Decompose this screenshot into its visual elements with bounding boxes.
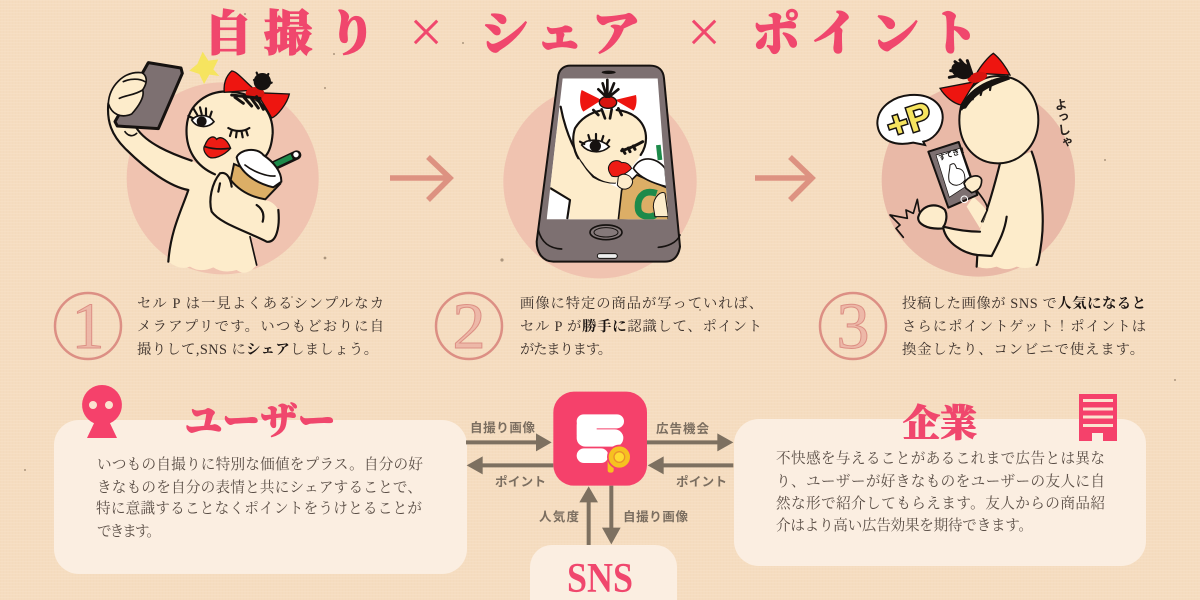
head on screen — [574, 110, 646, 183]
bow and hair — [940, 53, 1010, 109]
phone screen — [546, 78, 668, 220]
panel: company — [734, 393, 1146, 566]
step 2 — [436, 290, 763, 363]
text — [137, 295, 384, 358]
arrow labels: 自撮り画像 — [623, 509, 688, 524]
title: × — [687, 0, 721, 65]
text: 画像に特定の商品が写っていれば、 — [520, 294, 763, 312]
title — [204, 0, 978, 65]
number 2: 2 — [452, 290, 486, 363]
phone body — [537, 66, 680, 262]
illustration: taking a selfie — [108, 52, 319, 274]
step 3 — [820, 290, 1146, 363]
text: セル P が勝手に認識して、ポイント — [520, 317, 762, 335]
arrow labels: 自撮り画像 — [470, 420, 535, 435]
text: 撮りして,SNS にシェアしましょう。 — [137, 341, 378, 358]
background circle — [503, 85, 697, 278]
number 1: 1 — [72, 290, 104, 363]
bow on screen — [580, 80, 637, 118]
impact mark — [890, 199, 919, 237]
body and arm — [108, 103, 278, 273]
text: 換金したり、コンビニで使えます。 — [902, 341, 1144, 358]
phone in hand: すてき！ — [937, 145, 968, 163]
step 1 — [55, 290, 384, 363]
arrow: selfie image to SNS — [602, 486, 621, 544]
number 3: 3 — [836, 290, 870, 363]
speaker and home button — [538, 71, 680, 258]
letter p — [607, 445, 632, 473]
face on screen — [580, 134, 643, 177]
background circle — [127, 82, 319, 274]
arrow labels: ポイント — [495, 474, 546, 489]
icon: phone — [115, 63, 182, 129]
illustration: phone recognises product — [503, 66, 697, 278]
caption: よっしゃ: よっしゃ — [1051, 97, 1072, 149]
arrow labels: 人気度 — [539, 509, 579, 524]
letter S — [577, 414, 624, 463]
panel: user — [54, 385, 467, 574]
text: がたまります。 — [520, 341, 612, 358]
head from behind — [959, 76, 1038, 163]
cup on screen — [617, 145, 668, 222]
arrow: selfie image to app — [466, 433, 552, 451]
arrow labels: ポイント — [676, 474, 727, 489]
arrow: points from company — [648, 456, 733, 474]
arrow labels — [470, 420, 727, 524]
text — [776, 449, 1105, 534]
body on screen — [547, 107, 623, 220]
text: きなものを自分の表情と共にシェアすることで、 — [97, 478, 422, 496]
hair and bow — [224, 71, 289, 118]
text: 特に意識することなくポイントをうけとることが — [96, 499, 422, 517]
icon: building — [1079, 394, 1117, 441]
text: 介はより高い広告効果を期待できます。 — [776, 516, 1033, 534]
text: 不快感を与えることがあるこれまで広告とは異な — [776, 449, 1105, 467]
text — [520, 294, 763, 358]
arrows between app, user, company and SNS — [466, 433, 733, 545]
number 3 — [820, 290, 886, 363]
heading: 企業 — [903, 393, 977, 447]
hand — [108, 72, 146, 116]
arrow: step 2 to 3 — [755, 157, 812, 200]
arrow labels: 広告機会 — [656, 421, 709, 436]
text — [902, 294, 1146, 358]
text: メラアプリです。いつもどおりに自 — [137, 318, 384, 335]
speech bubble +P: +P — [881, 94, 937, 147]
arrow: step 1 to 2 — [390, 157, 450, 200]
text: できます。 — [97, 524, 161, 540]
app icon — [553, 392, 647, 486]
title: × — [409, 0, 443, 65]
hand holding cup — [210, 173, 279, 242]
phone in hand — [928, 142, 987, 228]
body — [918, 152, 1043, 269]
face — [188, 107, 249, 158]
panel: SNS — [530, 545, 677, 600]
text: セル P は一見よくあるシンプルなカ — [137, 295, 384, 312]
head — [187, 92, 273, 177]
arrow: ad opportunity to company — [647, 433, 733, 451]
text: り、ユーザーが好きなものをユーザーの友人に自 — [776, 472, 1105, 490]
text: 投稿した画像が SNS で人気になると — [902, 294, 1146, 312]
icon: user — [82, 385, 122, 438]
text: 然な形で紹介してもらえます。友人からの商品紹 — [776, 494, 1105, 512]
text — [96, 455, 423, 540]
background circle — [882, 83, 1075, 277]
arrow: popularity to app — [579, 486, 598, 545]
icon: star — [189, 52, 219, 84]
text: さらにポイントゲット！ポイントは — [902, 318, 1146, 335]
text: いつもの自撮りに特別な価値をプラス。自分の好 — [97, 455, 423, 473]
coffee cup — [231, 150, 299, 199]
number 2 — [436, 290, 502, 363]
number 1 — [55, 290, 121, 363]
arrow: points to user — [467, 456, 553, 474]
illustration: earning points — [877, 53, 1075, 277]
heading: ユーザー — [185, 391, 335, 445]
